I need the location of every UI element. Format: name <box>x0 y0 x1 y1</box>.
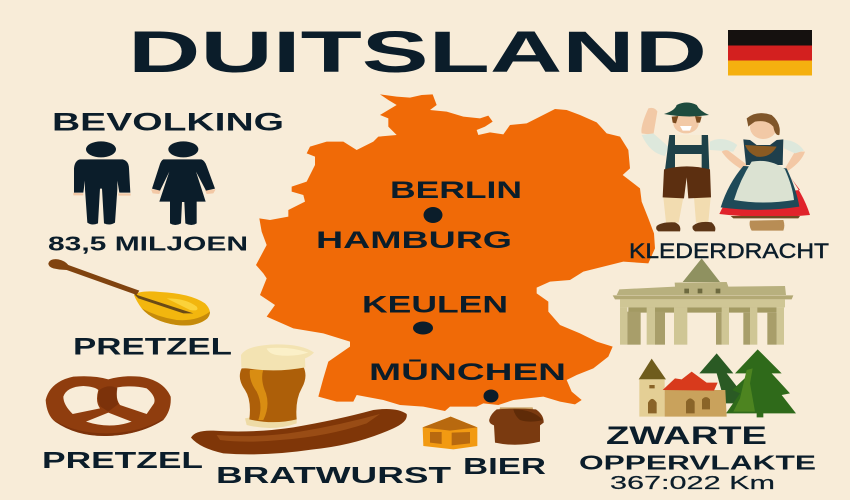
city dot: Keulen <box>413 322 433 334</box>
icon: house and fir trees <box>639 349 796 417</box>
icon: cheese block <box>423 417 477 449</box>
heading: Bevolking: BEVOLKING <box>52 108 284 136</box>
icon: pretzel <box>46 376 171 436</box>
icon: traditional costume couple <box>641 102 810 231</box>
icon: bratwurst <box>191 409 407 454</box>
icon: beer glass <box>240 344 314 428</box>
label: area value: 367:022 Km <box>610 473 775 493</box>
icon: rear fir tree <box>699 353 743 403</box>
icon: house <box>663 372 727 417</box>
icon: front fir tree <box>726 349 796 417</box>
label: population: 83,5 MILJOEN <box>48 234 248 256</box>
label: Hamburg: HAMBURG <box>316 227 512 254</box>
icon: woman in dirndl <box>719 113 810 231</box>
icon: tower <box>639 359 666 417</box>
icon: German flag <box>728 30 812 76</box>
icon: woman <box>151 141 216 225</box>
icon: lute <box>48 259 210 325</box>
city dot: München <box>484 390 498 402</box>
city dot: Berlin <box>424 207 442 223</box>
label: Oppervlakte: OPPERVLAKTE <box>579 452 816 474</box>
map of Germany <box>256 94 655 411</box>
label: Pretzel lower: PRETZEL <box>42 447 203 473</box>
label: Klederdracht: KLEDERDRACHT <box>629 240 829 263</box>
label: Bier: BIER <box>463 453 547 479</box>
label: München: MŪNCHEN <box>369 359 566 386</box>
label: Bratwurst: BRATWURST <box>216 462 451 488</box>
icon: bread loaf <box>489 407 544 445</box>
icon: Brandenburg Gate <box>613 258 793 345</box>
label: Pretzel upper: PRETZEL <box>73 334 232 360</box>
label: Berlin: BERLIN <box>390 177 522 204</box>
title: DUITSLAND <box>128 20 707 85</box>
label: Keulen: KEULEN <box>362 292 508 318</box>
icon: man and woman <box>73 141 216 225</box>
label: Zwarte: ZWARTE <box>606 422 767 450</box>
icon: man in lederhosen <box>641 102 737 231</box>
icon: man <box>73 141 131 225</box>
